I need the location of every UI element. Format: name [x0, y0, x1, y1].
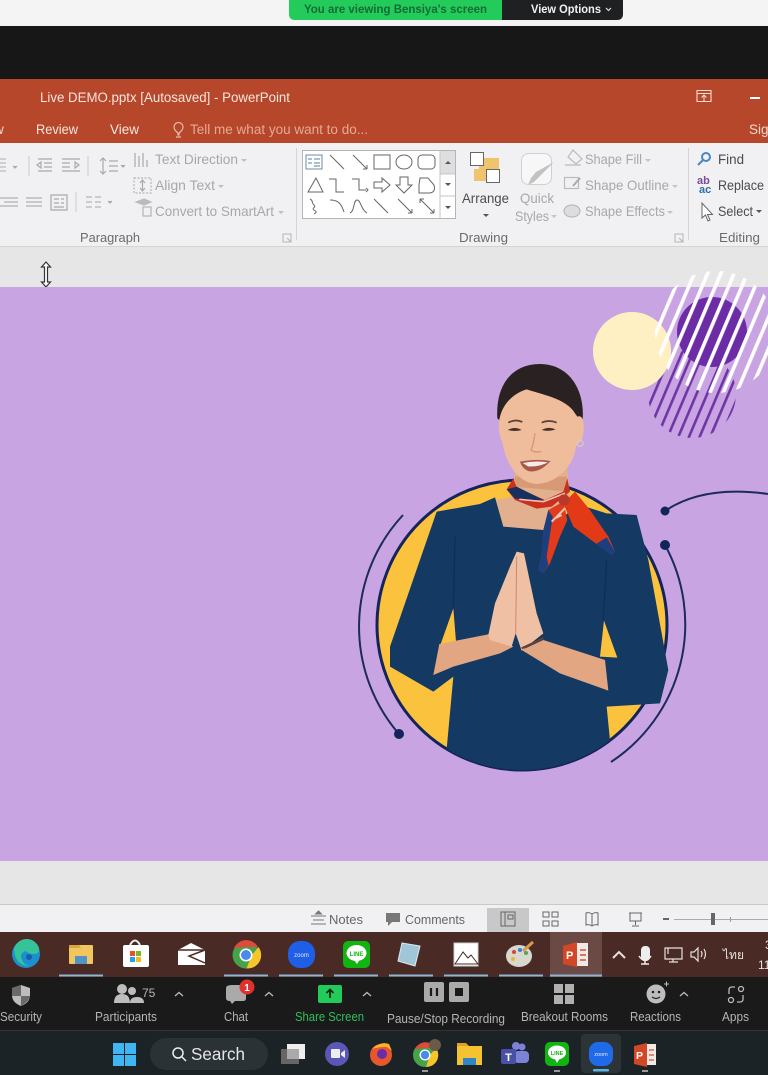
sleeve seams — [453, 537, 607, 620]
view options button: View Options — [531, 4, 601, 16]
ribbon panel — [0, 143, 768, 247]
icon: folder — [69, 945, 93, 964]
uniform — [390, 497, 668, 770]
select text: Select — [718, 203, 753, 219]
text direction: Text Direction — [155, 151, 238, 167]
slide canvas — [0, 287, 768, 861]
tab review: Review — [36, 122, 78, 137]
quick styles text: Quick — [520, 190, 555, 206]
dropdown carets — [218, 159, 284, 214]
breakout rooms button — [521, 984, 608, 1024]
comments text: Comments — [405, 913, 465, 927]
security label: Security — [0, 1010, 43, 1024]
icon: chat — [226, 985, 246, 1004]
icon: teams — [501, 1042, 529, 1064]
right arc with dot — [611, 540, 685, 762]
icon: apps — [729, 987, 743, 1002]
eyebrows — [508, 420, 557, 423]
icon: zoom app — [288, 941, 315, 968]
icon: arrange — [470, 152, 500, 182]
icon: mail — [178, 943, 205, 965]
striped purple circle — [648, 350, 736, 438]
replace text: Replace — [718, 177, 764, 193]
icon: chrome — [413, 1039, 441, 1067]
paragraph label: Paragraph — [80, 230, 140, 245]
icon: photos — [454, 943, 478, 966]
dialog launcher — [675, 234, 683, 242]
icon: powerpoint: P — [566, 950, 573, 962]
bracelet — [522, 638, 543, 648]
security button — [0, 985, 43, 1024]
scarf right tail — [563, 492, 615, 555]
icon: line app: LINE — [350, 952, 363, 958]
icon: meet — [325, 1042, 349, 1066]
icon: notes — [311, 911, 326, 924]
recording label: Pause/Stop Recording — [387, 1012, 505, 1026]
decorative circles — [593, 271, 768, 438]
smile — [520, 460, 551, 471]
finger line — [516, 557, 517, 633]
icon: line — [545, 1042, 569, 1066]
icon: pause — [424, 982, 444, 1002]
divider — [688, 148, 689, 240]
view buttons — [543, 912, 642, 926]
share screen label: Share Screen — [295, 1010, 364, 1024]
find text: Find — [718, 151, 744, 167]
icon: line app — [343, 941, 370, 968]
icon: edge — [12, 939, 40, 968]
icon: store — [123, 940, 149, 967]
participants label: Participants — [95, 1010, 157, 1024]
icon: comments — [386, 913, 400, 926]
apps button — [722, 986, 749, 1024]
yellow gap left — [441, 608, 456, 644]
active window highlight — [550, 932, 602, 977]
align text: Align Text — [155, 177, 215, 193]
scarf right tail tip — [596, 537, 615, 555]
windows taskbar (shared) — [0, 932, 768, 977]
caret — [363, 992, 371, 996]
icon: shield — [12, 985, 30, 1006]
icon: stop — [449, 982, 469, 1002]
scarf left tail edge — [538, 510, 553, 573]
search box — [150, 1038, 268, 1070]
search text: Search — [191, 1044, 245, 1064]
zoom meeting toolbar — [0, 977, 768, 1031]
left arc with dot — [359, 515, 404, 739]
yellow gap right — [600, 621, 617, 658]
icon: select cursor — [702, 203, 712, 221]
top right arc with dot — [660, 492, 768, 516]
reactions label: Reactions — [630, 1010, 681, 1024]
icon: explorer — [457, 1043, 482, 1065]
editing label: Editing — [719, 230, 760, 245]
running app indicators — [59, 974, 602, 976]
cream circle — [593, 312, 671, 390]
upper editor margin — [0, 247, 768, 287]
shape outline: Shape Outline — [585, 177, 669, 193]
caret — [175, 992, 183, 996]
icon: powerpoint — [634, 1043, 656, 1067]
running indicators — [422, 1070, 648, 1072]
icon: quick styles — [522, 154, 554, 185]
normal view button — [487, 908, 529, 932]
banner text: You are viewing Bensiya's screen — [304, 2, 487, 16]
icon: ribbon display — [697, 90, 711, 102]
lower editor margin — [0, 861, 768, 905]
shape effects: Shape Effects — [585, 203, 665, 219]
shape icons — [306, 155, 435, 214]
scarf stripes — [552, 508, 565, 522]
dialog launcher — [283, 234, 291, 242]
scarf left tail — [538, 502, 567, 573]
icon: chrome — [232, 940, 261, 969]
icon: smiley — [646, 984, 666, 1004]
participants button — [95, 984, 183, 1024]
participant count: 75 — [142, 986, 156, 1000]
paragraph icons — [0, 153, 151, 216]
icon: notepad — [398, 943, 420, 966]
icon: grid — [554, 984, 574, 1004]
breakout label: Breakout Rooms — [521, 1010, 608, 1024]
select caret — [756, 210, 762, 213]
shape style icons — [564, 150, 582, 217]
scarf pale stripe — [519, 493, 565, 502]
praying hands — [488, 552, 543, 651]
face — [499, 389, 584, 484]
black screen-share band — [0, 26, 768, 79]
icon: replace: ab — [697, 175, 710, 187]
window title: Live DEMO.pptx [Autosaved] - PowerPoint — [40, 90, 290, 105]
icon: powerpoint — [563, 942, 588, 967]
editing group — [697, 151, 764, 245]
hair — [497, 364, 583, 427]
icon: minimize — [750, 97, 760, 99]
icon: replace: ac — [699, 184, 711, 196]
arrange text: Arrange — [462, 190, 509, 206]
chevron — [606, 8, 611, 10]
icon: magnifier — [173, 1048, 183, 1058]
icon: paint — [506, 942, 533, 967]
scarf neck band — [507, 478, 570, 509]
share screen button — [295, 985, 371, 1024]
chat button — [224, 980, 273, 1024]
scarf — [507, 478, 615, 573]
icon: replace — [697, 175, 711, 196]
icon: zoom app: zoom — [294, 953, 309, 959]
zoom viewing banner — [289, 0, 623, 20]
eyes — [508, 428, 556, 431]
woman in navy uniform — [390, 364, 668, 770]
earring — [577, 440, 583, 446]
neck shadow — [515, 477, 567, 492]
scarf navy edge — [507, 487, 543, 500]
icon: participants — [114, 994, 144, 1003]
icon: windows start — [113, 1043, 136, 1066]
white striped circle — [655, 271, 768, 393]
drawing group — [459, 150, 683, 245]
divider — [296, 148, 297, 240]
PowerPoint status bar — [0, 905, 768, 932]
chat button: 1 — [244, 983, 250, 994]
sign in partial: Sig — [749, 122, 768, 137]
icon: share — [318, 985, 342, 1003]
scarf knot — [558, 494, 570, 506]
PowerPoint title bar — [0, 79, 768, 143]
zoom slider — [663, 913, 768, 925]
icon: line: LINE — [551, 1051, 564, 1057]
reactions button — [630, 982, 688, 1024]
icon: firefox — [370, 1043, 392, 1066]
caret — [680, 992, 688, 996]
icon: zoom: zoom — [594, 1052, 608, 1058]
tab view: View — [110, 122, 139, 137]
icon: powerpoint: P — [636, 1050, 643, 1062]
icon: find — [698, 153, 710, 165]
paragraph group — [0, 151, 291, 245]
drawing label: Drawing — [459, 230, 508, 245]
notes text: Notes — [329, 913, 363, 927]
icon: resize cursor — [42, 262, 50, 287]
right forearm — [522, 640, 608, 691]
icon: zoom — [581, 1034, 621, 1073]
chat label: Chat — [224, 1010, 248, 1024]
pause stop recording button — [387, 982, 505, 1026]
shape fill: Shape Fill — [585, 151, 642, 167]
convert to smartart: Convert to SmartArt — [155, 203, 274, 219]
nose — [531, 433, 541, 452]
neck and chest — [495, 457, 570, 531]
icon: task view — [281, 1044, 305, 1064]
caret — [265, 992, 273, 996]
input language: ไทย — [722, 948, 744, 962]
yellow circle backdrop — [377, 480, 667, 770]
windows 11 taskbar — [0, 1031, 768, 1075]
icon: light bulb — [174, 123, 183, 137]
system tray — [613, 938, 768, 972]
tell me search: Tell me what you want to do... — [190, 122, 368, 137]
carets — [551, 159, 678, 218]
solid purple circle — [677, 297, 747, 367]
left forearm — [433, 634, 513, 675]
quick styles text line 2: Styles — [515, 208, 549, 224]
shapes gallery — [302, 150, 456, 218]
icon: teams: T — [505, 1052, 512, 1064]
apps label: Apps — [722, 1010, 749, 1024]
arrange caret — [483, 214, 489, 217]
chat badge — [240, 980, 254, 994]
